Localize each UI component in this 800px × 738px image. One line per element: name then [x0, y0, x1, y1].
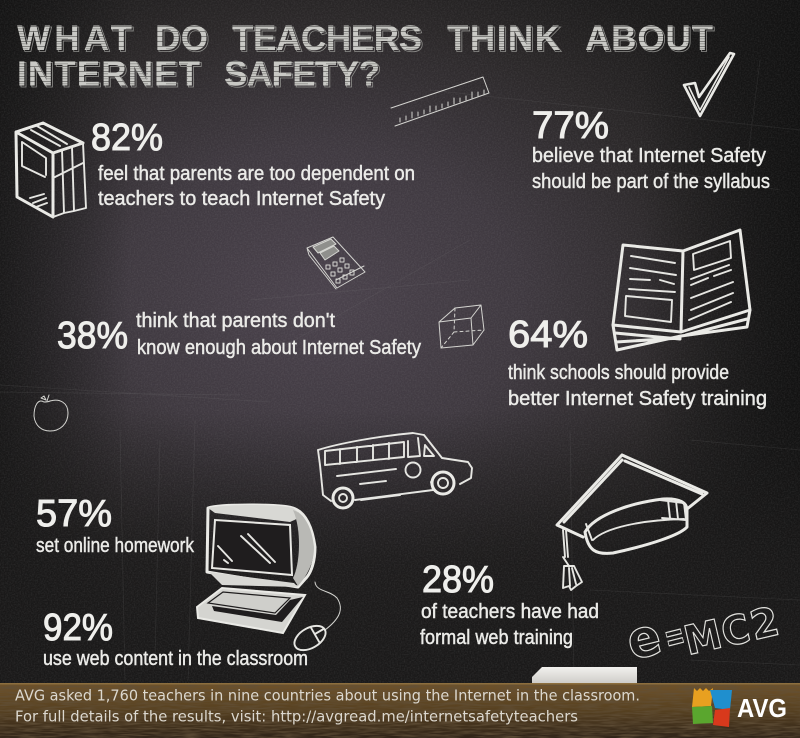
description: think schools should provide	[508, 362, 729, 384]
icon: open book	[613, 230, 750, 350]
chalk formula: e=MC2: C	[717, 606, 755, 657]
title chalk letters	[17, 19, 713, 94]
number: 38%	[57, 315, 128, 357]
icon: graduation cap	[557, 455, 707, 590]
stat: 38%	[57, 310, 421, 359]
footer text	[15, 686, 640, 726]
chalk formula: e=MC2: =	[659, 612, 690, 662]
monitor outline	[207, 505, 315, 587]
footer wooden ledge	[0, 683, 800, 738]
number: 92%	[43, 607, 113, 649]
title chalk letters: WHAT	[17, 19, 132, 58]
keyboard dark front	[212, 597, 303, 622]
stat: 64%	[508, 314, 767, 410]
title offset outline: INTERNET	[19, 56, 202, 95]
title offset outline: WHAT	[19, 21, 134, 60]
description: think that parents don't	[136, 310, 335, 332]
title offset outline	[19, 21, 715, 95]
icon: school bus	[318, 433, 472, 508]
title chalk letters: DO	[155, 19, 208, 58]
title offset outline: THINK	[449, 21, 562, 60]
icon: ruler	[391, 77, 489, 126]
stat: 77%	[532, 105, 770, 193]
mouse	[290, 621, 330, 655]
monitor top bezel	[208, 505, 303, 522]
description: should be part of the syllabus	[532, 171, 770, 193]
title offset outline: ABOUT	[587, 21, 715, 60]
footer text: For full details of the results, visit: http://avgread.me/internetsafetyteachers	[15, 708, 578, 726]
icon: AVG four-colour mark	[692, 688, 732, 727]
logo wordmark: AVG	[737, 693, 787, 723]
description	[420, 601, 599, 649]
screen	[212, 520, 292, 575]
title chalk letters: ABOUT	[585, 19, 713, 58]
title chalk letters: INTERNET	[17, 54, 200, 94]
title chalk letters: TEACHERS	[232, 19, 422, 58]
icon: stack of books	[16, 123, 86, 217]
number: 77%	[532, 105, 609, 147]
description: know enough about Internet Safety	[137, 337, 421, 359]
footer text: AVG asked 1,760 teachers in nine countries about using the Internet in the classroom.	[15, 686, 640, 704]
title offset outline: SAFETY?	[226, 56, 382, 95]
icon: check mark	[684, 53, 734, 116]
description: feel that parents are too dependent on	[98, 163, 415, 185]
number: 82%	[91, 117, 163, 159]
icon: apple	[34, 395, 68, 431]
monitor side hatching	[293, 510, 314, 586]
description	[532, 145, 770, 193]
title offset outline: TEACHERS	[234, 21, 424, 60]
description	[98, 163, 415, 210]
stat: 82%	[91, 117, 415, 210]
description: believe that Internet Safety	[532, 145, 766, 167]
monitor bottom bezel	[209, 572, 298, 587]
description: set online homework	[36, 535, 195, 557]
description: use web content in the classroom	[43, 648, 308, 670]
icon: calculator	[307, 237, 365, 289]
icon: desktop computer	[197, 505, 340, 655]
chalk formula: e=MC2: M	[680, 612, 726, 665]
number: 57%	[36, 493, 112, 535]
chalk formula: e=MC2	[621, 599, 784, 673]
description	[136, 310, 421, 359]
keyboard base	[197, 588, 305, 633]
description: formal web training	[420, 627, 573, 649]
stat: 57%	[36, 493, 195, 557]
title chalk letters: SAFETY?	[224, 54, 380, 94]
number: 28%	[422, 559, 494, 601]
description: teachers to teach Internet Safety	[98, 188, 385, 210]
icon: cube	[439, 305, 484, 348]
stat: 92%	[43, 607, 308, 670]
mouse cable	[315, 582, 340, 630]
description: better Internet Safety training	[508, 388, 767, 410]
chalk formula: e=MC2: e	[621, 606, 667, 673]
stat: 28%	[420, 559, 599, 649]
screen glare	[218, 534, 275, 563]
title offset outline: DO	[157, 21, 210, 60]
AVG logo	[692, 688, 787, 727]
description: of teachers have had	[421, 601, 599, 623]
keys	[208, 592, 290, 613]
chalk formula: e=MC2: 2	[746, 599, 784, 650]
title	[17, 19, 715, 95]
chalk stick	[532, 667, 637, 683]
title chalk letters: THINK	[447, 19, 560, 58]
number: 64%	[508, 314, 588, 356]
description	[508, 362, 767, 410]
